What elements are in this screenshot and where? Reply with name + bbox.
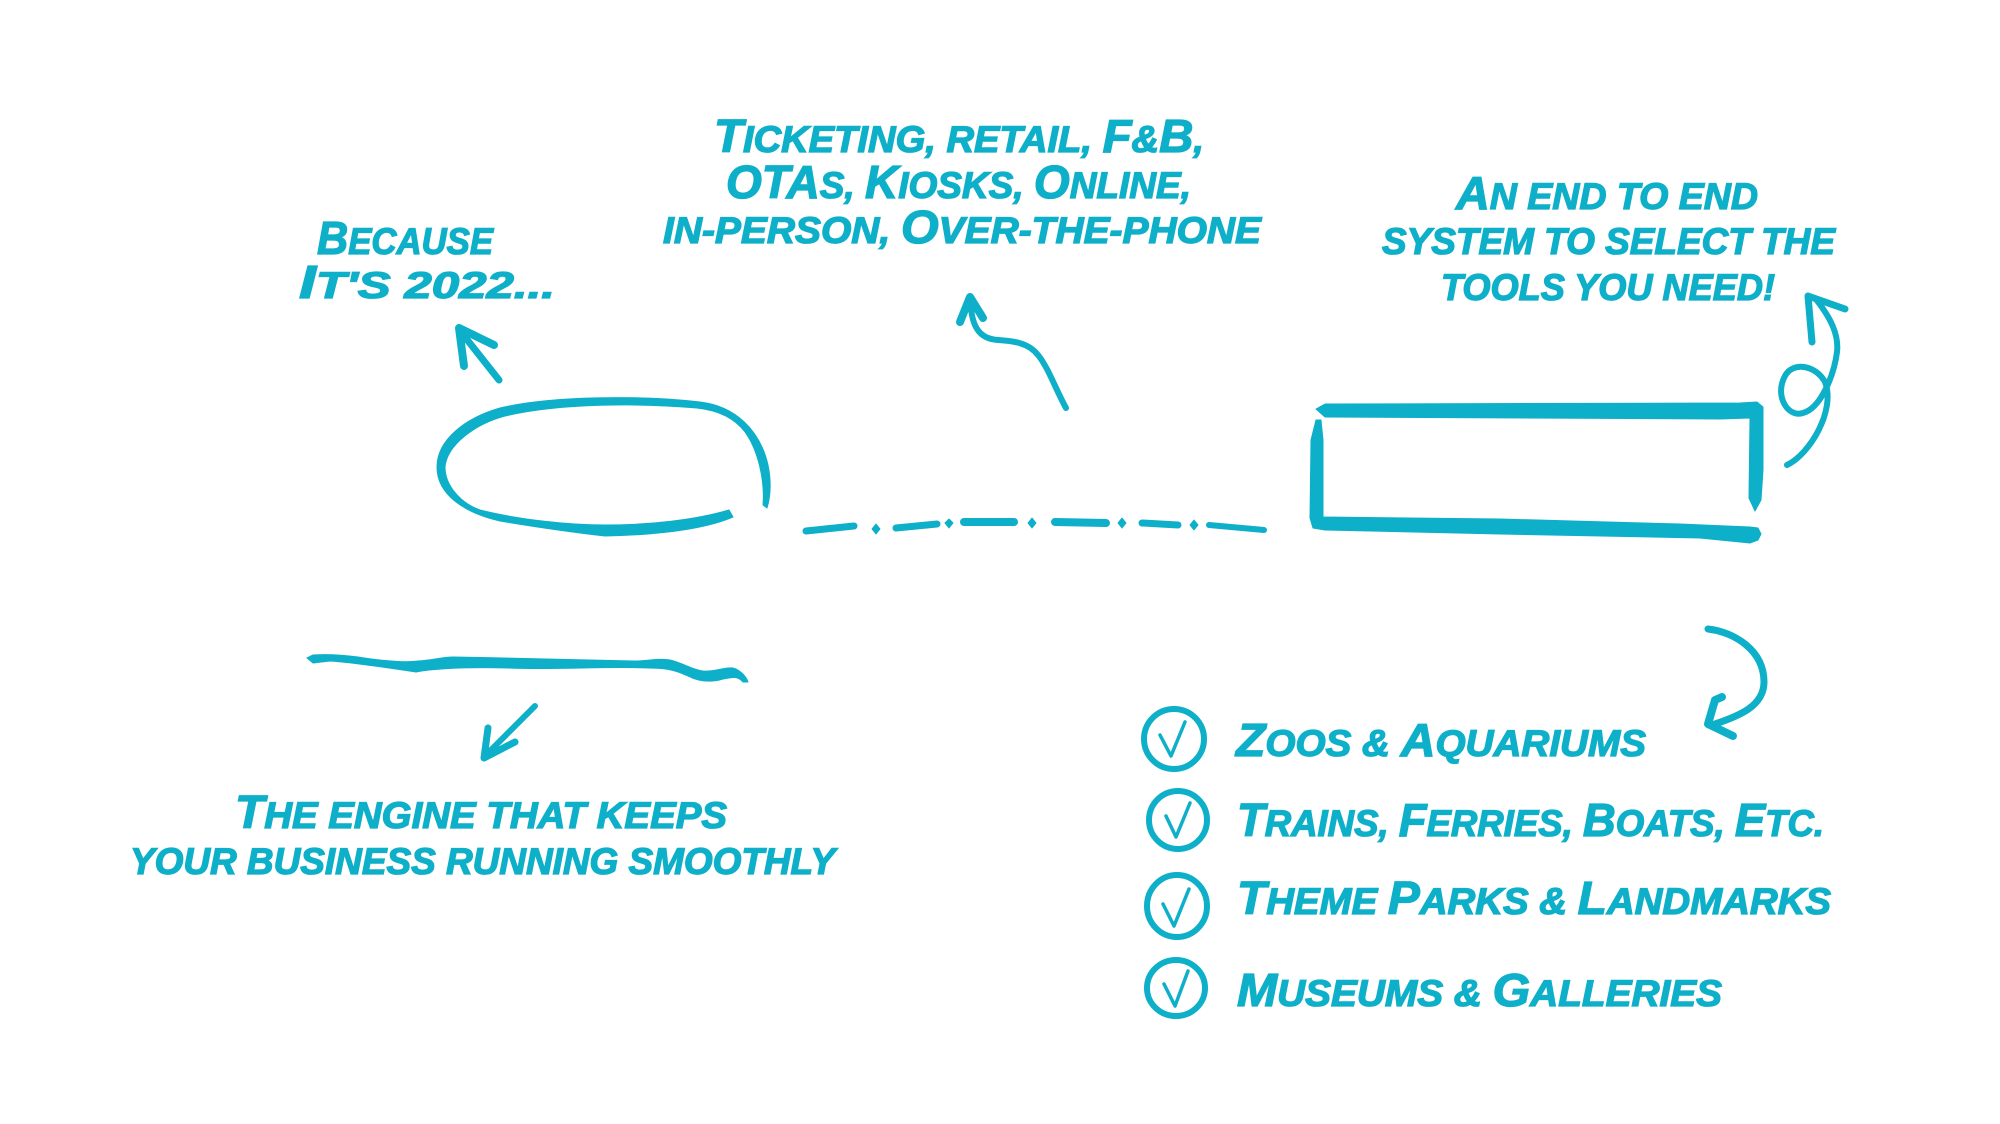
text: engine description xyxy=(130,786,838,882)
list item: trains and ferries: TRAINS, FERRIES, BOATS, ETC. xyxy=(1237,794,1824,846)
shape: hand drawn ellipse xyxy=(437,398,770,536)
text: ticketing channels: OTAS, KIOSKS, ONLINE, xyxy=(726,156,1191,208)
arrow: looped up to end to end text xyxy=(1781,296,1845,465)
shape: dash-dot line xyxy=(806,518,1264,534)
text: because it's 2022: BECAUSE xyxy=(317,212,494,264)
text: ticketing channels xyxy=(663,110,1262,253)
text: ticketing channels: TICKETING, RETAIL, F&B, xyxy=(714,110,1204,162)
list item: theme parks and landmarks xyxy=(1147,872,1831,937)
text: end to end system: AN END TO END xyxy=(1455,167,1758,219)
shape: hand drawn rectangle xyxy=(1310,402,1763,543)
text: end to end system: TOOLS YOU NEED! xyxy=(1441,267,1775,308)
text: because it's 2022: IT'S 2022... xyxy=(299,256,555,308)
list item: museums and galleries: MUSEUMS & GALLERIES xyxy=(1237,964,1722,1016)
list item: zoos and aquariums xyxy=(1144,709,1646,769)
list item: zoos and aquariums: ZOOS & AQUARIUMS xyxy=(1234,714,1646,766)
text: ticketing channels: IN-PERSON, OVER-THE-PHONE xyxy=(663,201,1262,253)
text: engine description: YOUR BUSINESS RUNNING SMOOTHLY xyxy=(130,841,838,882)
list item: theme parks and landmarks: THEME PARKS & LANDMARKS xyxy=(1237,872,1831,924)
arrow: up-left to because text xyxy=(459,328,499,380)
text: engine description: THE ENGINE THAT KEEPS xyxy=(235,786,727,838)
list: venue types xyxy=(1144,709,1831,1016)
shape: wobbly underline xyxy=(307,655,748,682)
arrow: down-left to engine text xyxy=(484,706,535,758)
text: end to end system: SYSTEM TO SELECT THE xyxy=(1382,221,1836,262)
text: end to end system xyxy=(1382,167,1836,308)
arrow: curved down to list xyxy=(1708,629,1764,736)
arrow: curved up to ticketing text xyxy=(960,297,1066,408)
text: because it's 2022 xyxy=(299,212,555,308)
